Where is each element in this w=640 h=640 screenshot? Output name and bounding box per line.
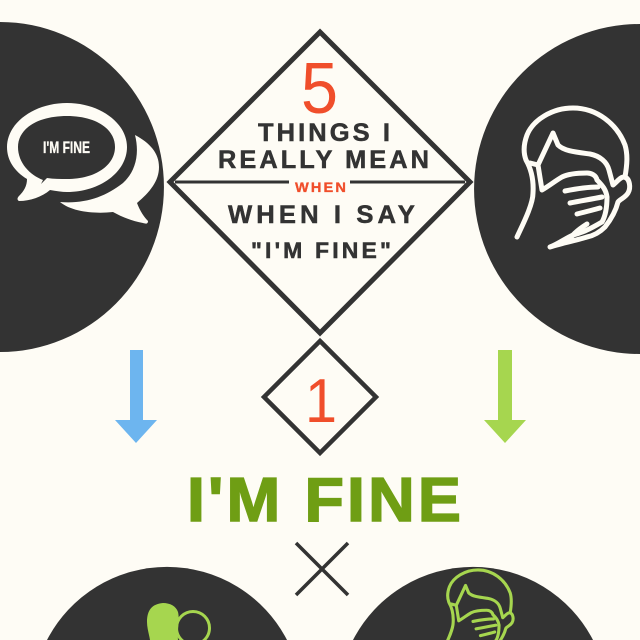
- arrow: blue down: [115, 350, 157, 443]
- title line: things i: THINGS I: [258, 119, 393, 147]
- icon: times symbol: [296, 543, 348, 595]
- panel: bottom right circle: [353, 567, 593, 640]
- divider right: [350, 180, 465, 184]
- icon: speech bubbles: [7, 103, 159, 224]
- icon: face covered by hand: [517, 108, 630, 247]
- icon: green face covered by hand: [446, 568, 515, 640]
- panel: bottom left circle: [47, 567, 287, 640]
- number diamond: [264, 341, 376, 453]
- panel: left circle with speech bubbles: [0, 22, 164, 352]
- icon: green head and ring: [147, 603, 210, 640]
- title line: when i say: WHEN I SAY: [228, 201, 419, 229]
- panel: title diamond: [170, 32, 470, 333]
- title line: really mean: REALLY MEAN: [218, 146, 432, 174]
- heading: I'M FINE: I'M FINE: [187, 466, 464, 535]
- divider left: [175, 180, 289, 184]
- title word: when: WHEN: [295, 179, 348, 195]
- panel: right circle with face icon: [474, 24, 640, 354]
- bubble label: I'M FINE: [43, 138, 90, 157]
- title number 5: 5: [301, 49, 338, 129]
- title line: i'm fine: "I'M FINE": [251, 238, 394, 263]
- arrow: green down: [484, 350, 526, 443]
- number 1: 1: [305, 367, 337, 436]
